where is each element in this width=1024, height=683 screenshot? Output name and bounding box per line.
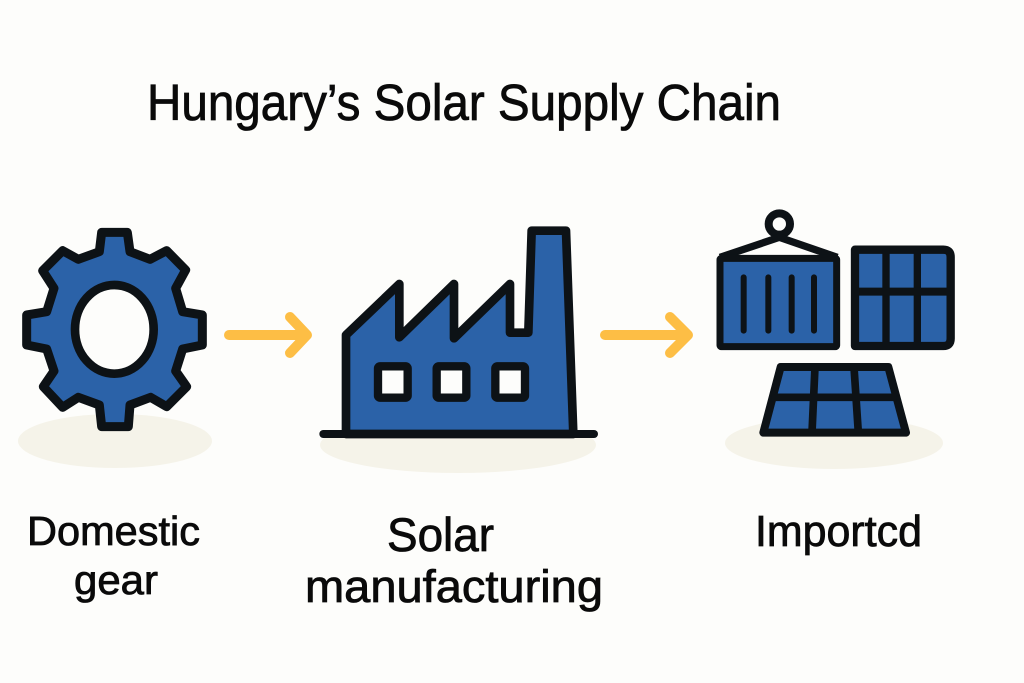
shadow: factory xyxy=(320,417,596,473)
label: domestic gear: gear xyxy=(74,557,158,603)
label: imported: Importcd xyxy=(755,507,922,556)
icon: solar panel upright xyxy=(855,250,951,346)
title: Hungary’s Solar Supply Chain xyxy=(147,74,781,131)
icon: shipping container xyxy=(720,213,837,347)
shadow: gear xyxy=(18,414,212,468)
label: domestic gear: Domestic xyxy=(27,508,200,554)
label: solar manufacturing xyxy=(305,508,603,612)
icons: imported goods xyxy=(720,213,951,433)
factory group xyxy=(320,231,596,473)
icon: gear xyxy=(27,232,202,427)
label: solar manufacturing: Solar xyxy=(387,508,494,561)
imported group xyxy=(720,213,951,469)
icon: factory xyxy=(323,231,594,434)
arrow: gear to factory xyxy=(229,317,307,353)
gear group xyxy=(18,232,212,468)
arrow: factory to imported xyxy=(605,317,688,353)
icon: solar panel tilted xyxy=(763,367,906,433)
label: solar manufacturing: manufacturing xyxy=(305,561,603,612)
label: domestic gear xyxy=(27,508,200,603)
shadow: imported xyxy=(725,417,943,469)
